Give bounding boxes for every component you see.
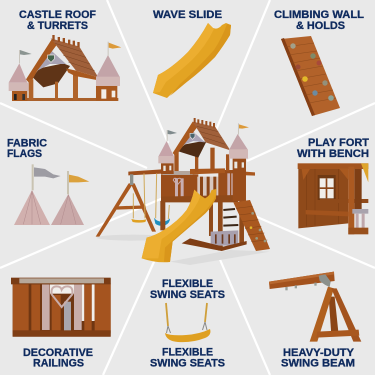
castle roof (173, 118, 230, 158)
right turret and flag (229, 123, 249, 201)
heading: flexible swing seats upper: FLEXIBLE (162, 278, 213, 290)
panel: climbing wall and holds (274, 9, 364, 116)
panel: heavy-duty swing beam (269, 272, 361, 370)
illustration: fort with bench (298, 163, 368, 234)
illustration: railing panel (11, 278, 111, 337)
heading: play fort: PLAY FORT (308, 137, 369, 149)
illustration: castle roof (9, 35, 121, 101)
center: full playset (96, 118, 270, 265)
panel: decorative railings (11, 278, 111, 370)
heading: play fort: WITH BENCH (297, 148, 369, 160)
heading: fabric flags: FABRIC (7, 138, 47, 150)
illustration: climbing wall (281, 36, 340, 116)
illustration: flags on turrets (14, 164, 89, 225)
illustration: swing seat (165, 303, 210, 342)
swing seats (131, 173, 170, 226)
heading: play fort (297, 137, 369, 160)
swing set frame (96, 169, 162, 237)
heading: climbing wall (274, 9, 364, 32)
heading: decorative railings (23, 347, 93, 370)
fort deck and walls (161, 168, 255, 202)
climbing wall (233, 200, 270, 251)
illustration: swing beam (269, 272, 361, 342)
panel: wave slide (153, 9, 231, 98)
heading: climbing wall: & HOLDS (296, 20, 345, 32)
heading: flexible swing seats lower: FLEXIBLE (162, 346, 213, 358)
left turret and flag (158, 130, 177, 174)
lower posts and frame (160, 201, 247, 251)
heading: decorative railings: RAILINGS (33, 358, 84, 370)
heading: wave slide: WAVE SLIDE (153, 9, 222, 21)
climbing holds (290, 43, 334, 101)
heading: swing beam (281, 347, 355, 370)
heading: swing beam: HEAVY-DUTY (283, 347, 355, 359)
roof posts (174, 148, 229, 172)
heading: decorative railings: DECORATIVE (23, 347, 93, 359)
heading: castle roof (19, 9, 96, 32)
heading: flexible swing seats upper: SWING SEATS (150, 289, 225, 301)
yellow slide (142, 189, 216, 262)
heading: swing beam: SWING BEAM (281, 358, 355, 370)
panel: flexible swing seats (150, 278, 225, 370)
panel: castle roof and turrets (9, 9, 121, 101)
heading: castle roof: CASTLE ROOF (19, 9, 96, 21)
heading: climbing wall: CLIMBING WALL (274, 9, 364, 21)
heading: flexible swing seats lower (150, 346, 225, 370)
heading: flexible swing seats lower: SWING SEATS (150, 358, 225, 370)
heading: fabric flags: FLAGS (7, 148, 42, 160)
panel: play fort with bench (297, 137, 369, 234)
heading: flexible swing seats upper (150, 278, 225, 301)
illustration: yellow slide (153, 23, 231, 98)
panel: fabric flags (7, 138, 89, 225)
heading: fabric flags (7, 138, 47, 160)
heading: castle roof: & TURRETS (27, 20, 88, 32)
